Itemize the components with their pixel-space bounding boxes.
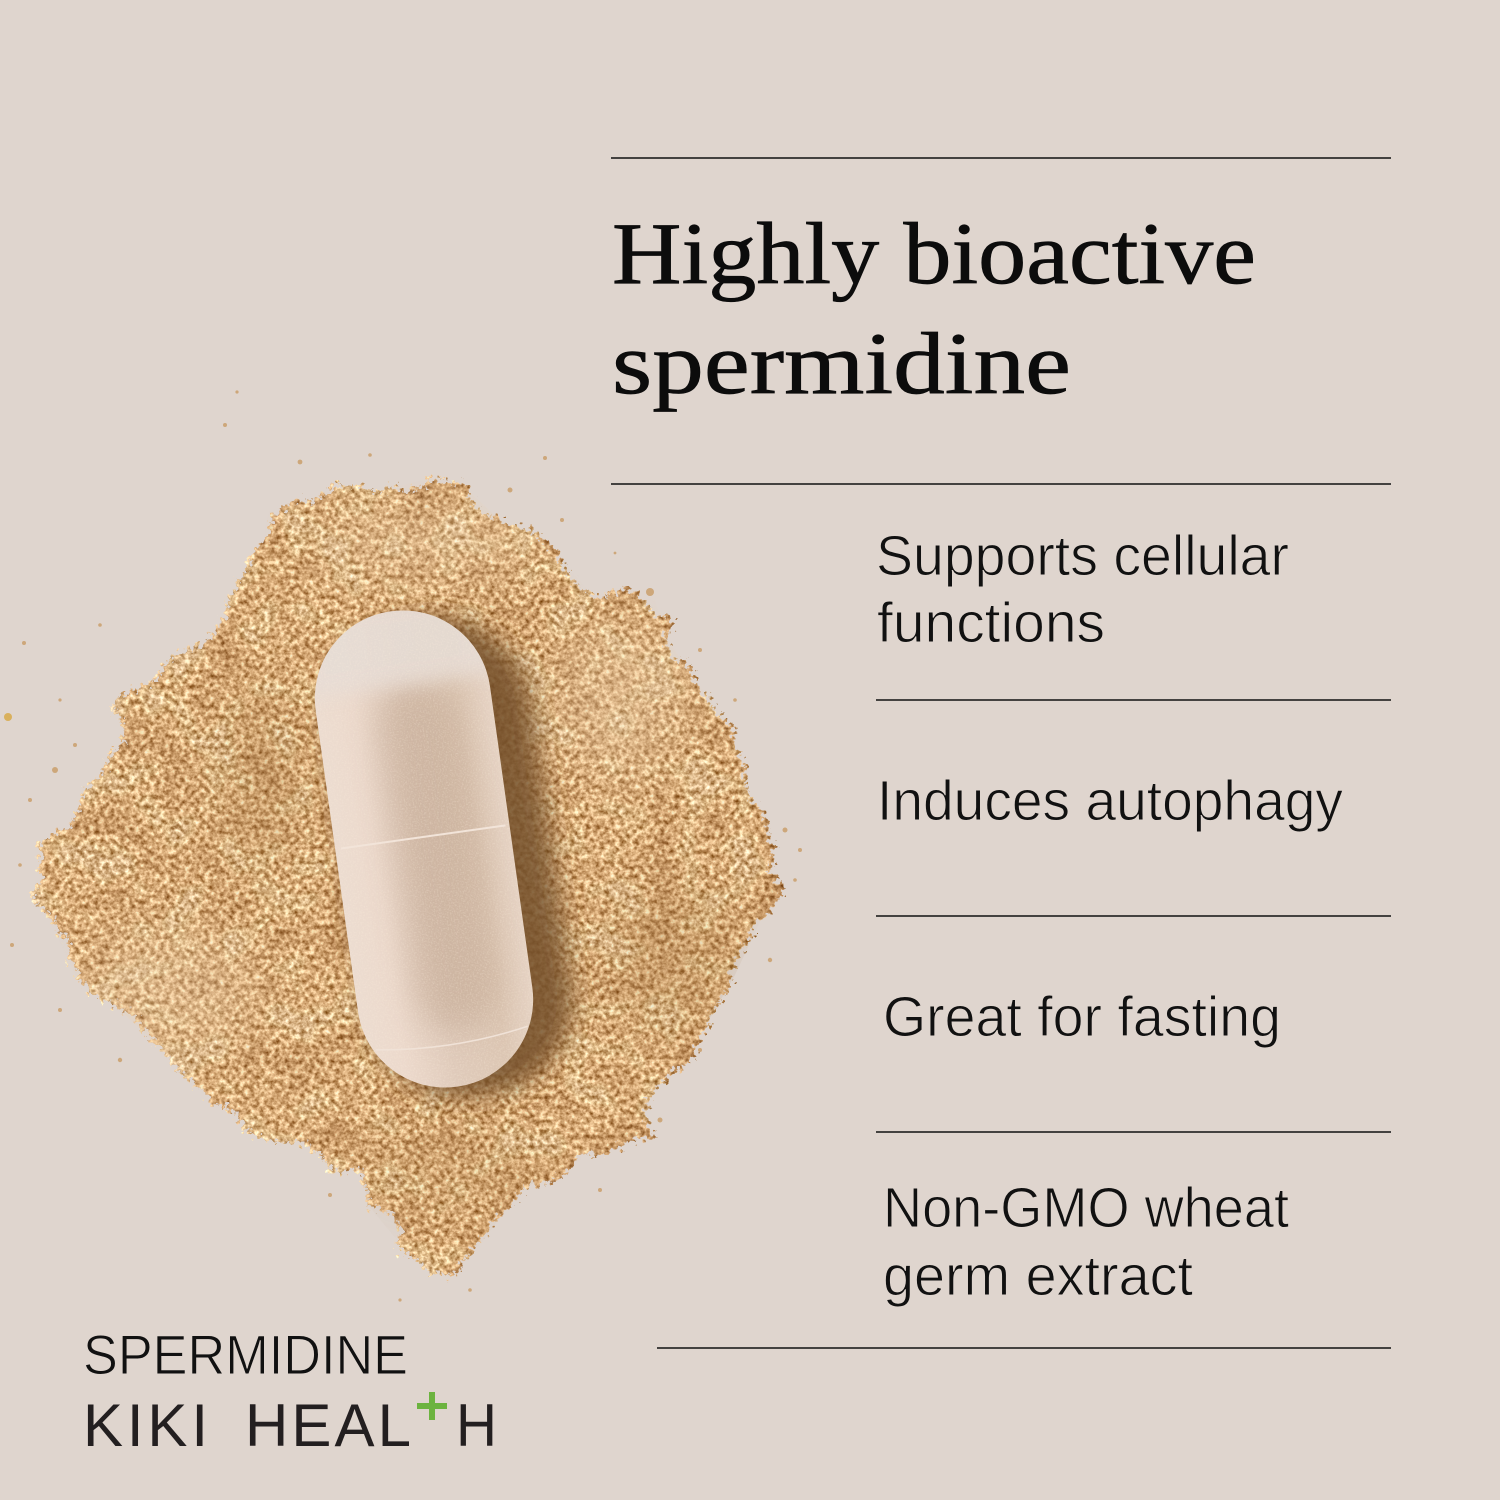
- benefit: wheat germ: [883, 1176, 1289, 1308]
- powder shading: [80, 505, 730, 1205]
- photo: powder pile with capsule: [4, 390, 802, 1302]
- capsule: [314, 610, 534, 1088]
- capsule shadow: [314, 604, 585, 1110]
- scattered powder specks: [4, 390, 802, 1302]
- benefit: wheat germ: germ extract: [883, 1244, 1193, 1308]
- benefit: cellular functions: Supports cellular: [876, 524, 1289, 588]
- divider lines: [611, 158, 1391, 1348]
- benefit: cellular functions: [876, 524, 1289, 655]
- title: Highly bioactive: [612, 206, 1256, 303]
- title: [612, 206, 1256, 413]
- benefit: fasting: Great for fasting: [883, 985, 1281, 1049]
- brand logo: [83, 1392, 497, 1459]
- brand logo: H: [456, 1392, 497, 1459]
- benefit: cellular functions: functions: [877, 591, 1105, 655]
- title: spermidine: [612, 316, 1071, 413]
- brand logo: HEAL: [245, 1392, 411, 1459]
- brand logo: KIKI: [83, 1392, 208, 1459]
- product name: SPERMIDINE: [83, 1323, 408, 1386]
- benefit: autophagy: Induces autophagy: [877, 769, 1343, 833]
- capsule end: [375, 1026, 529, 1055]
- capsule inner powder: [371, 678, 504, 1036]
- capsule seam: [341, 825, 506, 849]
- benefit: wheat germ: Non-GMO wheat: [883, 1176, 1289, 1240]
- icon: green plus: [417, 1392, 447, 1420]
- powder pile: [40, 478, 772, 1275]
